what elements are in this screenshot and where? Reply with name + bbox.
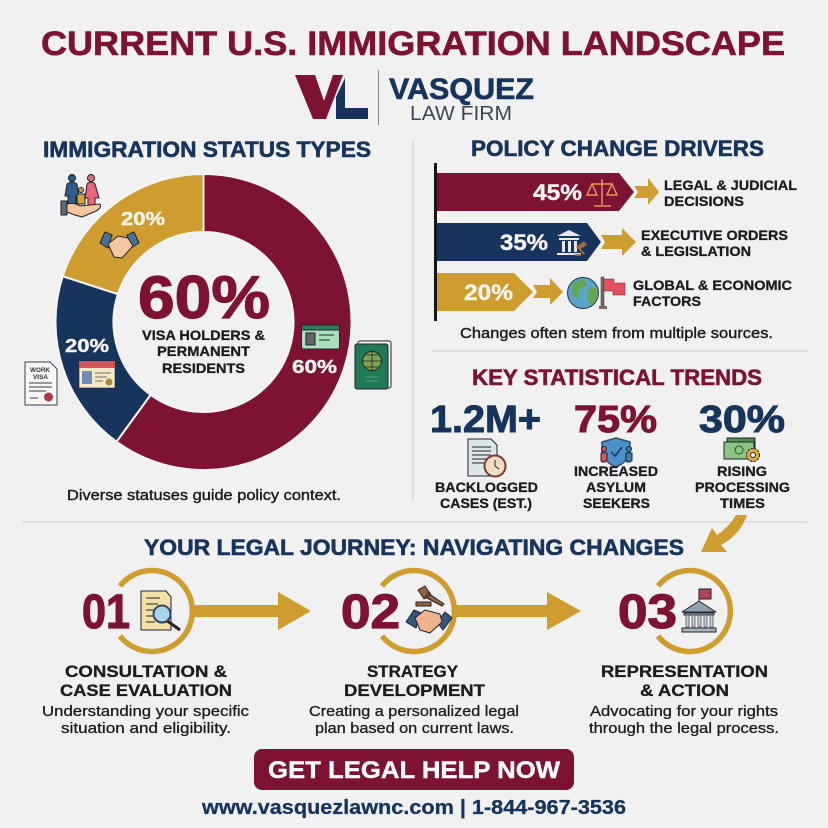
heading: immigration status types: IMMIGRATION STATUS TYPES <box>43 137 371 162</box>
ring <box>658 570 730 652</box>
arrow <box>533 278 563 305</box>
call-to-action button: GET LEGAL HELP NOW <box>268 757 560 784</box>
panel: key statistical trends <box>430 365 790 511</box>
description: plan based on current laws. <box>315 720 514 737</box>
heading: key statistical trends: KEY STATISTICAL TRENDS <box>472 365 762 390</box>
stat: increased asylum seekers: INCREASED <box>574 463 658 479</box>
label: navy 20%: 20% <box>65 336 109 356</box>
title: STRATEGY <box>367 662 459 681</box>
stat: increased asylum seekers: 75% <box>574 399 657 441</box>
panel: policy change drivers <box>434 136 797 342</box>
description: Understanding your specific <box>42 703 250 720</box>
icon: globe <box>568 278 598 308</box>
description: situation and eligibility. <box>61 720 231 737</box>
title: REPRESENTATION <box>601 662 768 681</box>
title: CONSULTATION & <box>65 662 227 681</box>
number: 02 <box>341 586 400 639</box>
bar: legal and judicial 45%: 45% <box>533 180 582 205</box>
logo subtitle: LAW FIRM <box>410 103 512 125</box>
bar: global and economic 20% <box>437 273 792 311</box>
stat: increased asylum seekers: ASYLUM <box>586 479 646 495</box>
title: DEVELOPMENT <box>344 681 486 700</box>
number: 01 <box>82 586 130 639</box>
label <box>633 277 792 309</box>
arrow <box>455 592 581 630</box>
description: Advocating for your rights <box>590 703 778 720</box>
description <box>42 703 250 737</box>
title <box>60 662 232 700</box>
arrow: curved gold to journey <box>701 515 747 552</box>
icon: scales <box>587 179 617 206</box>
title: & ACTION <box>640 681 729 700</box>
label: maroon 60%: 60% <box>292 357 337 377</box>
icon: work visa document: WORK <box>30 367 50 374</box>
caption: policy drivers: Changes often stem from multiple sources. <box>460 325 773 342</box>
stat: backlogged cases: BACKLOGGED <box>435 479 538 495</box>
label: LEGAL & JUDICIAL <box>664 177 797 193</box>
icon: work visa document <box>25 362 57 405</box>
label: gold 20%: 20% <box>121 209 165 229</box>
icon: shield and people <box>601 438 632 467</box>
icon: document and magnifier <box>141 591 180 630</box>
stat: backlogged cases: CASES (EST.) <box>440 495 532 511</box>
footer contact line: www.vasquezlawnc.com | 1-844-967-3536 <box>201 797 626 819</box>
description <box>309 703 519 737</box>
icon: gavel and handshake <box>406 586 452 633</box>
logo mark: VL <box>295 75 368 119</box>
caption: status types: Diverse statuses guide policy context. <box>67 487 341 504</box>
logo: Vasquez Law Firm <box>295 70 534 125</box>
icon: work visa document: VISA <box>33 374 48 381</box>
call-to-action button <box>254 749 574 790</box>
stat: rising processing times: 30% <box>699 399 785 441</box>
icon: family on hand <box>61 174 100 217</box>
icon: visa card <box>79 361 115 388</box>
label: & LEGISLATION <box>641 243 751 259</box>
stat: rising processing times <box>695 399 790 511</box>
label: FACTORS <box>633 293 701 309</box>
step 1 <box>42 571 311 737</box>
heading: your legal journey: YOUR LEGAL JOURNEY: NAVIGATING CHANGES <box>144 535 684 560</box>
description <box>589 703 779 737</box>
icon: handshake <box>100 232 139 258</box>
arrow <box>601 228 636 256</box>
bar: executive orders 35% <box>437 223 788 261</box>
title <box>344 662 486 700</box>
title: CURRENT U.S. IMMIGRATION LANDSCAPE <box>41 25 785 63</box>
stat: backlogged cases <box>430 399 541 511</box>
icon: money and gear <box>724 438 760 462</box>
icon: passport <box>355 341 391 389</box>
label: DECISIONS <box>664 193 744 209</box>
description: Creating a personalized legal <box>309 703 519 720</box>
panel: your legal journey <box>42 535 779 737</box>
bar: legal and judicial 45% <box>437 173 797 211</box>
arrow <box>634 178 659 205</box>
donut center label: PERMANENT <box>157 343 250 359</box>
donut chart <box>55 174 352 470</box>
label: EXECUTIVE ORDERS <box>641 227 788 243</box>
step 2 <box>309 570 581 737</box>
ring <box>382 570 454 652</box>
stat: increased asylum seekers: SEEKERS <box>583 495 650 511</box>
title: CASE EVALUATION <box>60 681 232 700</box>
bar: global and economic 20%: 20% <box>464 280 513 305</box>
logo name: VASQUEZ <box>389 73 534 106</box>
icon: courthouse with flag <box>682 589 716 632</box>
ring <box>120 571 192 652</box>
panel: immigration status types <box>25 137 391 504</box>
label <box>664 177 797 209</box>
stat: rising processing times: TIMES <box>720 495 765 511</box>
donut center label: VISA HOLDERS & <box>142 327 265 343</box>
arrow <box>193 592 311 630</box>
title <box>601 662 768 700</box>
stat: rising processing times: PROCESSING <box>695 479 790 495</box>
donut center value: 60% <box>138 264 270 331</box>
icon: red flag <box>599 277 625 309</box>
icon: courthouse and gavel <box>557 230 587 256</box>
label <box>641 227 788 259</box>
stat: backlogged cases: 1.2M+ <box>430 399 541 441</box>
bar: executive orders 35%: 35% <box>500 230 548 255</box>
donut center label <box>142 327 265 376</box>
description: through the legal process. <box>589 720 779 737</box>
stat: rising processing times: RISING <box>717 463 767 479</box>
donut center label: RESIDENTS <box>162 360 245 376</box>
number: 03 <box>618 586 677 639</box>
icon: document and clock <box>468 439 506 476</box>
step 3 <box>589 570 779 737</box>
heading: policy change drivers: POLICY CHANGE DRIVERS <box>471 136 764 161</box>
label: GLOBAL & ECONOMIC <box>633 277 792 293</box>
stat: increased asylum seekers <box>574 399 658 511</box>
icon: green card <box>302 325 340 349</box>
